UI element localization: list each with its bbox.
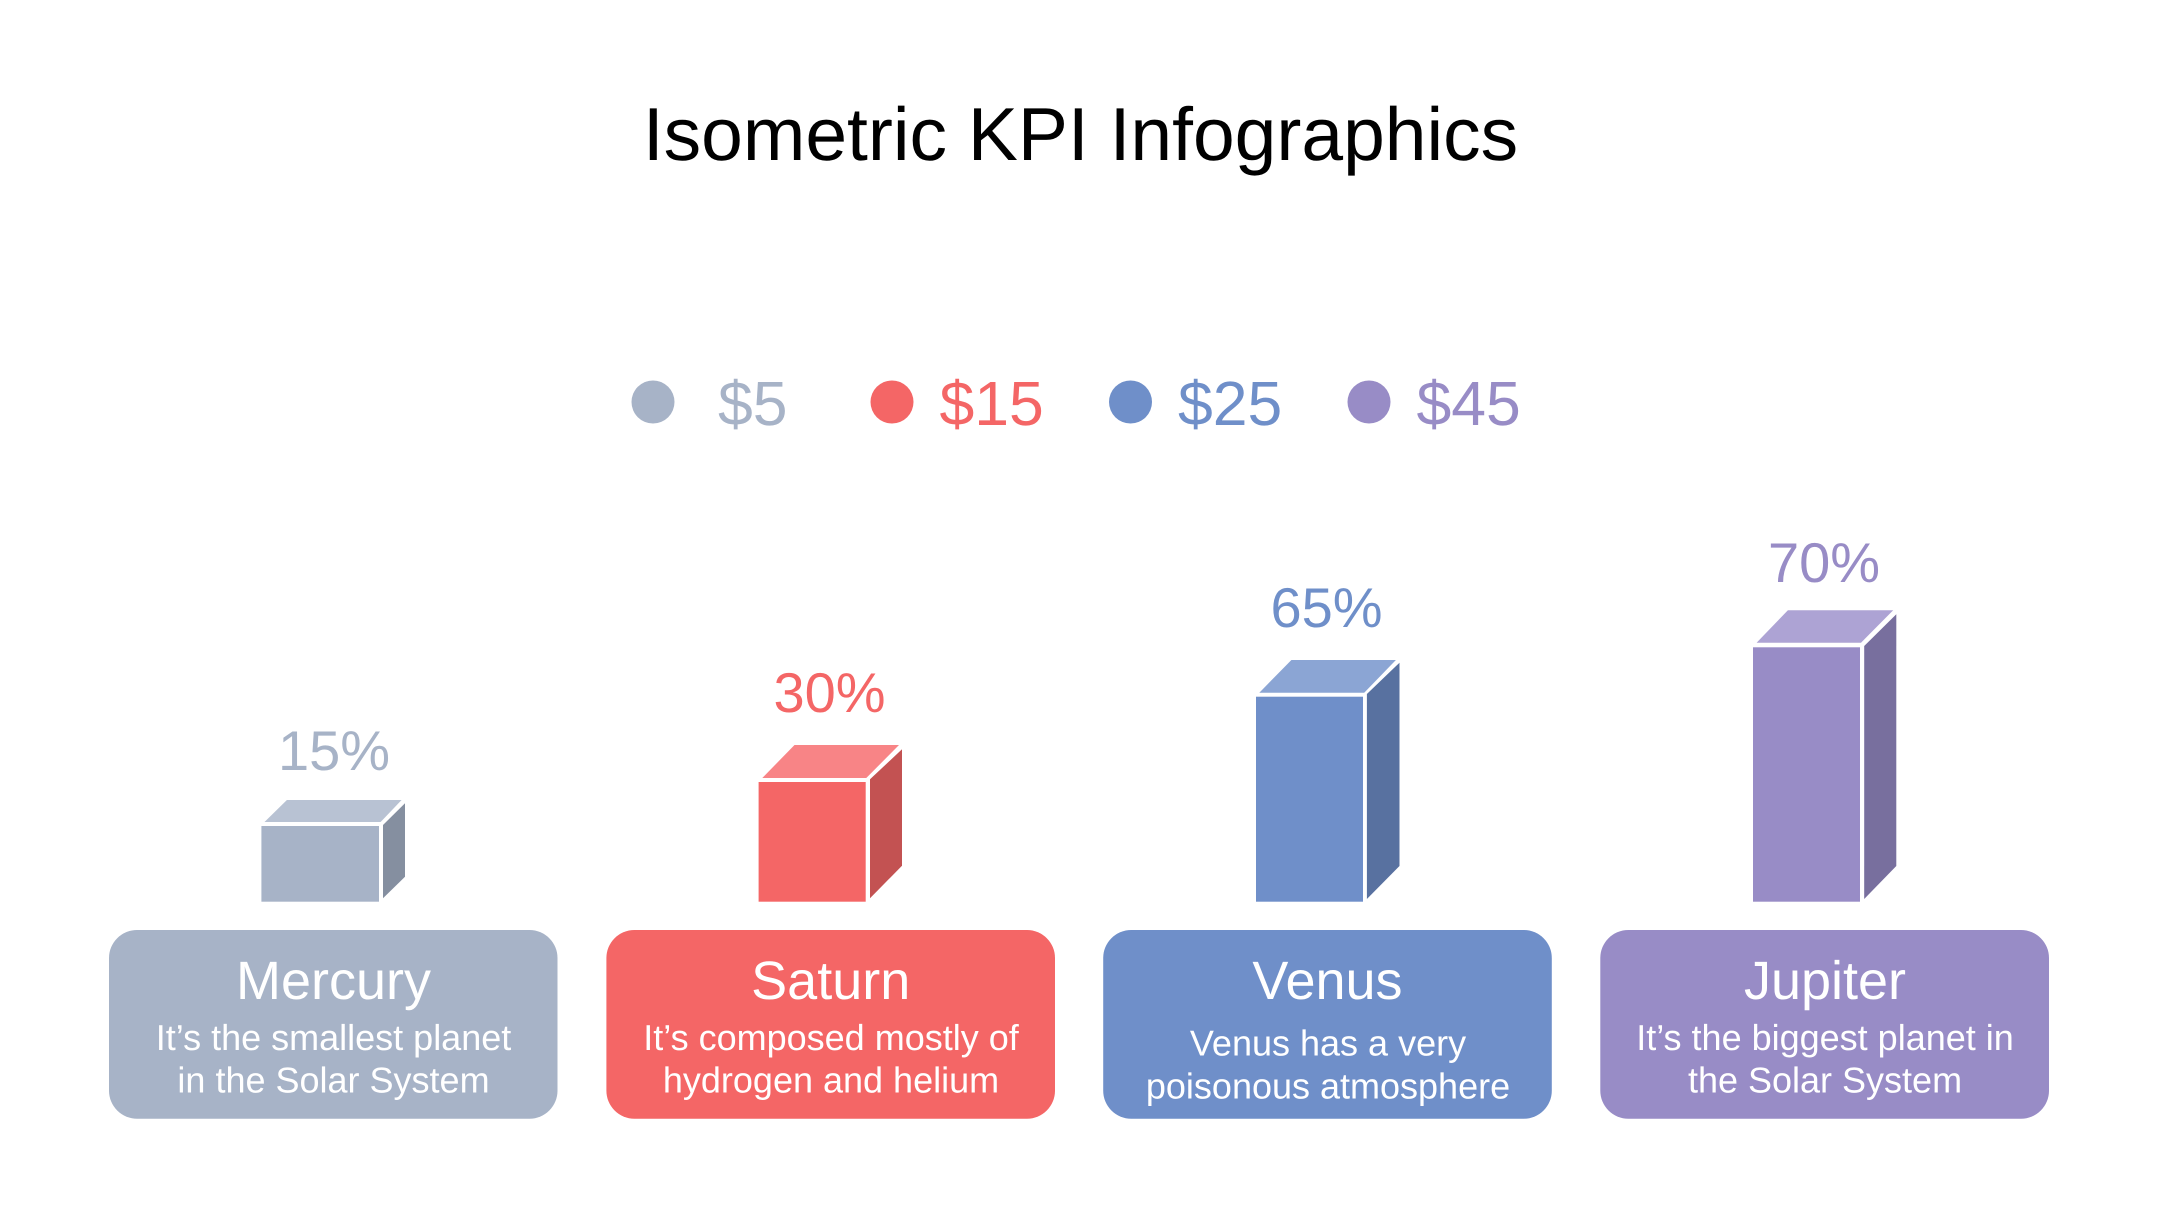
card description: It’s the biggest planet in	[1636, 1017, 2014, 1058]
legend item: $15	[870, 369, 1044, 439]
card description: Venus has a very	[1190, 1022, 1466, 1064]
legend item: $25	[1109, 369, 1282, 439]
card description: poisonous atmosphere	[1146, 1066, 1510, 1106]
legend item: $5: $5	[718, 369, 788, 439]
isometric bar: Venus	[1256, 660, 1400, 902]
card description	[643, 1017, 1020, 1100]
card: Jupiter	[1600, 930, 2049, 1119]
isometric bar: Mercury	[261, 800, 405, 902]
card description: the Solar System	[1688, 1060, 1962, 1100]
legend	[632, 369, 1521, 439]
card heading: Jupiter	[1744, 951, 1906, 1011]
percentage: 65%: 65%	[1270, 576, 1383, 639]
panel: Mercury	[109, 719, 558, 1119]
legend item: $25: $25	[1178, 369, 1282, 439]
legend item: $5	[632, 369, 788, 439]
percentage: 30%: 30%	[773, 661, 886, 724]
isometric bar: Jupiter	[1753, 610, 1896, 902]
panel: Jupiter	[1600, 531, 2049, 1119]
panel: Venus	[1103, 576, 1552, 1119]
card description	[1636, 1017, 2014, 1100]
percentage: 15%: 15%	[278, 719, 390, 782]
card heading: Mercury	[236, 951, 431, 1011]
card description: It’s the smallest planet	[156, 1017, 511, 1058]
legend item: $15: $15	[940, 369, 1044, 439]
card: Mercury	[109, 930, 558, 1119]
card description: in the Solar System	[177, 1060, 490, 1100]
card: Venus	[1103, 930, 1552, 1119]
card description	[1146, 1022, 1510, 1106]
percentage: 70%: 70%	[1768, 531, 1880, 594]
panel: Saturn	[606, 661, 1055, 1119]
card: Saturn	[606, 930, 1055, 1119]
card heading: Saturn	[751, 951, 910, 1011]
legend item: $45: $45	[1416, 369, 1521, 439]
card description: It’s composed mostly of	[643, 1017, 1020, 1058]
isometric bar: Saturn	[759, 745, 902, 902]
card description: hydrogen and helium	[663, 1060, 999, 1100]
title: Isometric KPI Infographics	[643, 92, 1518, 176]
card heading: Venus	[1252, 951, 1403, 1011]
card description	[156, 1017, 511, 1100]
legend item: $45	[1348, 369, 1521, 439]
